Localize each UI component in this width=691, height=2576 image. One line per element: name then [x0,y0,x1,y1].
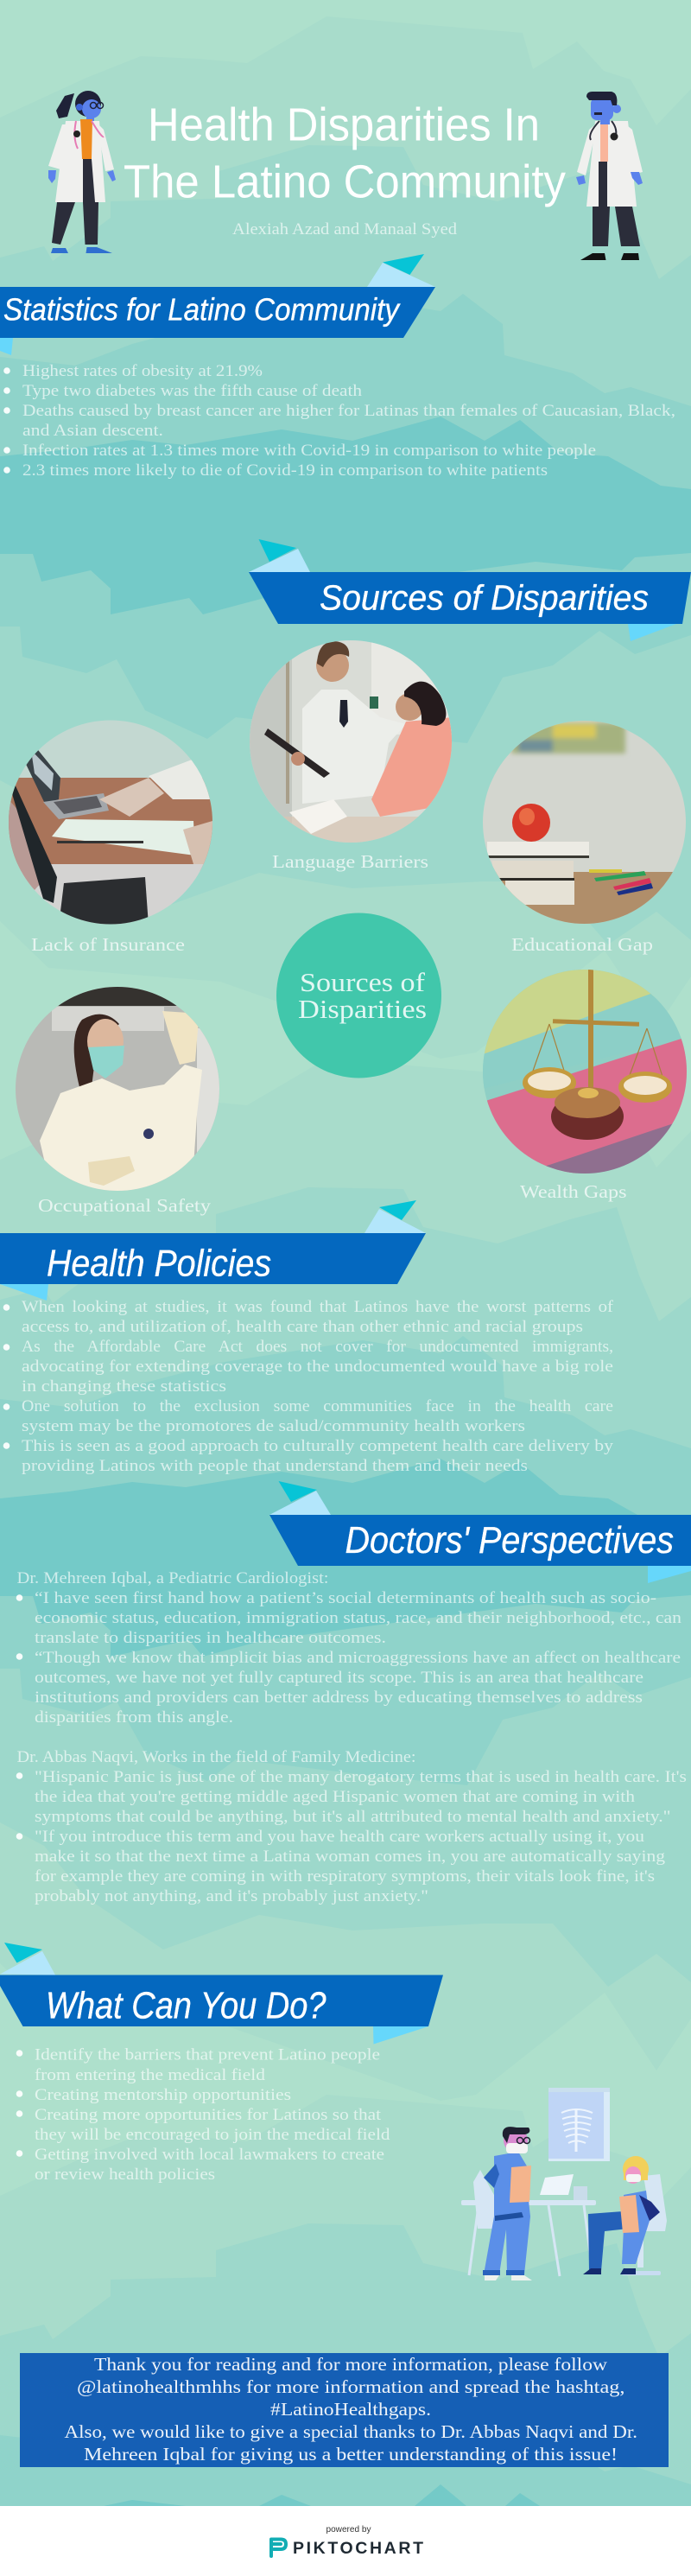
panel: doctors' perspectives [16,1481,691,1905]
quotes: Dr. Mehreen Iqbal: Dr. Mehreen Iqbal, a Pediatric Cardiologist: [17,1570,328,1587]
quotes: Dr. Abbas Naqvi: "If you introduce this term and you have health care workers actually using it, you [35,1829,644,1846]
caption: language barriers: Language Barriers [272,851,428,872]
policies list: in changing these statistics [22,1378,226,1396]
action list: Creating more opportunities for Latinos so that [35,2107,382,2124]
action list [16,2046,390,2184]
action list: from entering the medical field [35,2067,266,2084]
title: Health Disparities In [148,99,540,150]
panel: statistics [0,254,675,480]
quotes: Dr. Abbas Naqvi: for example they are coming in with respiratory symptoms, their vitals look fine, it's [35,1868,655,1886]
center circle: sources of disparities: Sources of [300,967,426,997]
policies list: As the Affordable Care Act does not cover for undocumented immigrants, [22,1339,613,1356]
action list: they will be encouraged to join the medical field [35,2127,390,2144]
statistics list: Deaths caused by breast cancer are higher for Latinas than females of Caucasian, Black, [22,403,675,420]
quotes: Dr. Abbas Naqvi: make it so that the next time a Latina woman comes in, you are automatically saying [35,1848,665,1866]
caption: occupational safety: Occupational Safety [38,1195,212,1216]
quotes: Dr. Abbas Naqvi: symptoms that could be anything, but it's all attributed to mental health and anxiety." [35,1809,670,1826]
policies list: system may be the promotores de salud/community health workers [22,1418,525,1435]
statistics list: Infection rates at 1.3 times more with Covid-19 in comparison to white people [22,442,596,460]
illustration: female doctor [48,91,116,253]
quotes: Dr. Mehreen Iqbal: institutions and providers can better address by educating themselves to address [35,1689,643,1707]
statistics list: and Asian descent. [22,423,163,440]
heading banner [269,1481,691,1583]
policies list: One solution to the exclusion some communities face in the health care [22,1398,613,1415]
quotes: Dr. Abbas Naqvi: probably not anything, and it's probably just anxiety." [35,1888,428,1905]
authors: Alexiah Azad and Manaal Syed [232,220,458,239]
caption: lack of insurance: Lack of Insurance [31,934,185,955]
heading banner [0,1200,426,1301]
action list: Creating mentorship opportunities [35,2087,291,2104]
policies list: access to, and utilization of, health care than other ethnic and racial groups [22,1319,583,1336]
heading banner: Statistics for Latino Community [3,292,401,327]
panel: what can you do [0,1943,667,2280]
footer: powered by Piktochart [0,2506,691,2576]
icon: Piktochart logo [271,2539,286,2556]
illustration: male doctor [576,92,643,260]
statistics list: 2.3 times more likely to die of Covid-19 in comparison to white patients [22,462,548,480]
quotes: Dr. Abbas Naqvi: the idea that you're getting middle aged Hispanic women that are coming in with [35,1789,635,1806]
quotes: Dr. Mehreen Iqbal: “I have seen first hand how a patient’s social determinants of health such as socio- [35,1590,656,1607]
statistics list: Highest rates of obesity at 21.9% [22,363,263,380]
panel: sources of disparities [9,539,691,1216]
policies list [3,1299,614,1475]
photo: educational gap [483,721,687,925]
quotes: Dr. Mehreen Iqbal: “Though we know that implicit bias and microaggressions have an affect on healthcare [35,1650,681,1667]
caption: wealth gaps: Wealth Gaps [520,1181,627,1202]
heading banner: Health Policies [47,1243,271,1284]
policies list: providing Latinos with people that understand them and their needs [22,1458,528,1475]
thank-you callout: Thank you for reading and for more information, please follow [94,2354,608,2375]
photo: occupational safety [16,987,219,1193]
policies list: This is seen as a good approach to culturally competent health care delivery by [22,1438,614,1455]
quotes: Dr. Mehreen Iqbal: outcomes, we have not yet fully captured its scope. This is an area that healthcare [35,1670,643,1687]
thank-you callout [20,2353,669,2467]
heading banner [0,1943,443,2045]
heading banner [0,254,435,355]
panel: health policies [0,1200,614,1475]
action list: or review health policies [35,2166,215,2184]
quotes: Dr. Mehreen Iqbal: economic status, education, immigration status, race, and their neighborhood, etc., can [35,1610,681,1627]
heading banner: What Can You Do? [46,1984,326,2027]
center circle: sources of disparities [276,913,441,1078]
footer: powered by Piktochart: PIKTOCHART [293,2539,423,2558]
action list: Getting involved with local lawmakers to create [35,2147,384,2164]
caption: educational gap: Educational Gap [511,934,653,955]
quotes: Dr. Mehreen Iqbal: disparities from this angle. [35,1709,233,1727]
title [124,99,566,207]
quotes: Dr. Mehreen Iqbal: translate to disparities in healthcare outcomes. [35,1630,386,1647]
quotes: Dr. Abbas Naqvi [16,1749,687,1905]
policies list: When looking at studies, it was found that Latinos have the worst patterns of [22,1299,614,1316]
footer: powered by Piktochart: powered by [326,2524,371,2535]
statistics list: Type two diabetes was the fifth cause of death [22,383,362,400]
quotes: Dr. Mehreen Iqbal [16,1570,681,1727]
policies list: advocating for extending coverage to the undocumented would have a big role [22,1358,613,1376]
photo: wealth gaps [483,968,687,1184]
statistics list [3,363,675,480]
quotes: Dr. Abbas Naqvi: Dr. Abbas Naqvi, Works in the field of Family Medicine: [17,1749,416,1766]
heading banner [249,539,691,641]
illustration: medical staff with x-ray [461,2088,667,2280]
thank-you callout: Also, we would like to give a special thanks to Dr. Abbas Naqvi and Dr. [64,2421,637,2442]
photo: language barriers [249,639,453,844]
thank-you callout: @latinohealthmhhs for more information and spread the hashtag, [77,2376,625,2397]
photo: lack of insurance [9,720,212,925]
center circle: sources of disparities: Disparities [298,994,427,1024]
thank-you callout: Mehreen Iqbal for giving us a better understanding of this issue! [84,2444,618,2465]
quotes: Dr. Abbas Naqvi: "Hispanic Panic is just one of the many derogatory terms that is used in health care. It's [35,1769,687,1786]
thank-you callout: #LatinoHealthgaps. [270,2399,431,2420]
title: The Latino Community [124,156,566,207]
action list: Identify the barriers that prevent Latino people [35,2046,380,2064]
heading banner: Sources of Disparities [320,577,649,617]
header [48,91,643,260]
